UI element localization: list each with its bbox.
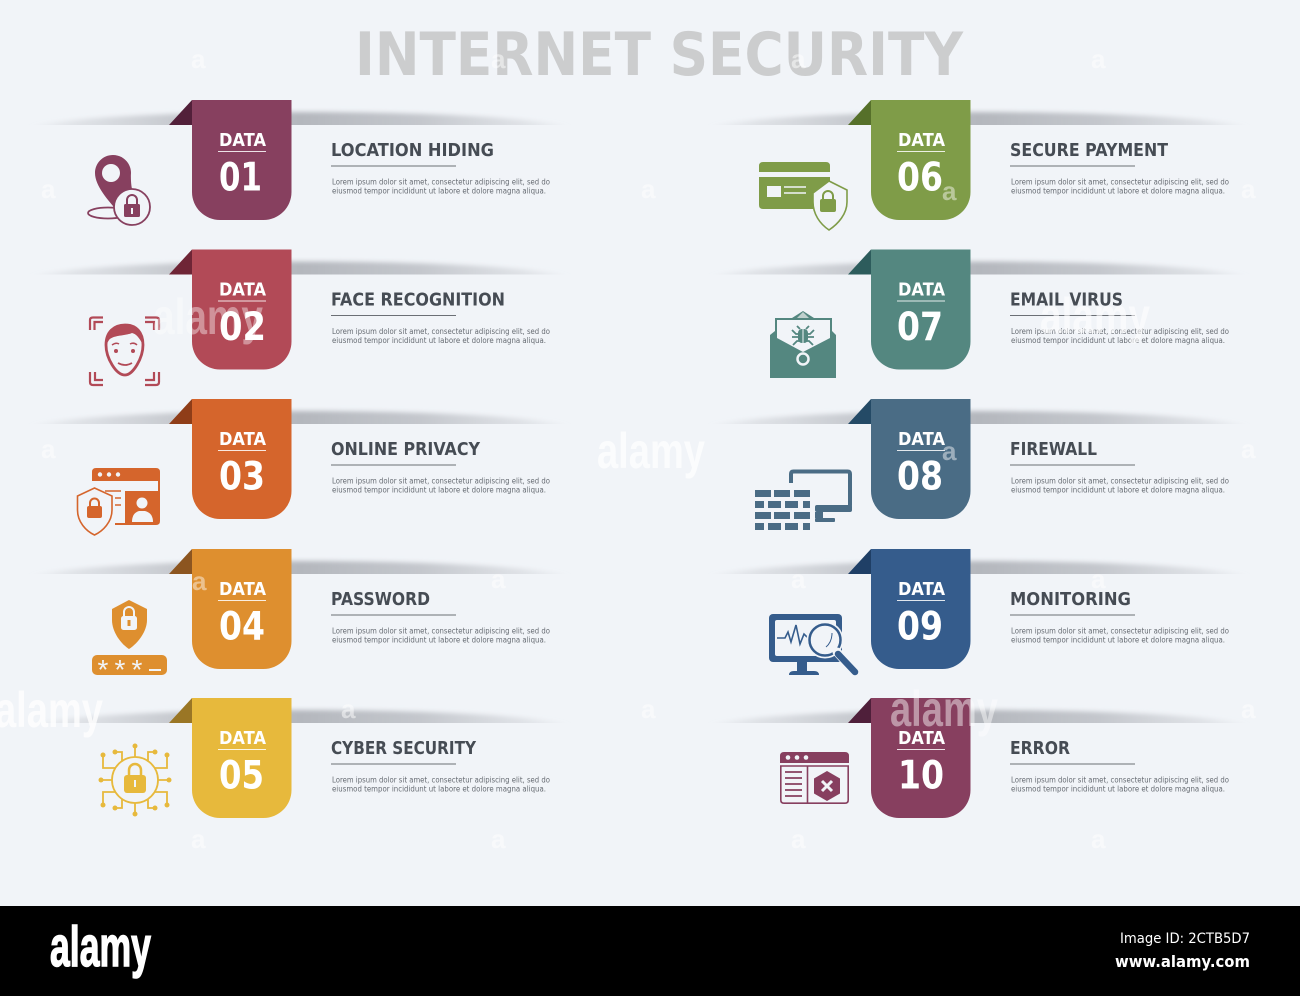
website: www.alamy.com bbox=[1115, 952, 1250, 971]
heading 02: FACE RECOGNITION bbox=[331, 290, 505, 310]
text 05: eiusmod tempor incididunt ut labore et dolore magna aliqua. bbox=[332, 784, 546, 794]
heading 07: EMAIL VIRUS bbox=[1010, 290, 1123, 310]
ribbon 07 bbox=[848, 250, 970, 370]
icon: shield lock and password field: *** bbox=[98, 654, 142, 685]
ribbon 09 bbox=[848, 549, 970, 669]
panel: 10 error bbox=[704, 698, 1254, 818]
ribbon 01 bbox=[169, 100, 292, 220]
heading 05: CYBER SECURITY bbox=[331, 738, 477, 759]
watermark overlay: a bbox=[491, 564, 506, 594]
ribbon 07: 07 bbox=[897, 305, 943, 350]
text 01: eiusmod tempor incididunt ut labore et dolore magna aliqua. bbox=[332, 186, 546, 196]
ribbon 04: 04 bbox=[219, 604, 265, 650]
ribbon 01: DATA bbox=[219, 130, 266, 151]
ribbon 05: 05 bbox=[219, 754, 264, 798]
text 03 bbox=[332, 476, 550, 494]
text 04: Lorem ipsum dolor sit amet, consectetur adipiscing elit, sed do bbox=[332, 626, 550, 636]
ribbon 08: DATA bbox=[898, 429, 945, 450]
watermark overlay: a bbox=[1241, 694, 1256, 724]
icon: face scan bbox=[90, 318, 159, 385]
text 02: Lorem ipsum dolor sit amet, consectetur adipiscing elit, sed do bbox=[332, 327, 550, 336]
text 06: eiusmod tempor incididunt ut labore et dolore magna aliqua. bbox=[1011, 186, 1225, 196]
text 03: eiusmod tempor incididunt ut labore et dolore magna aliqua. bbox=[332, 486, 546, 494]
watermark overlay: alamy bbox=[597, 423, 705, 479]
panel: 09 monitoring bbox=[704, 549, 1254, 669]
ribbon 06: DATA bbox=[898, 130, 945, 151]
icon: credit card with shield bbox=[759, 162, 847, 230]
panel: 06 secure payment bbox=[704, 100, 1254, 220]
watermark overlay: alamy bbox=[153, 289, 263, 345]
text 07: Lorem ipsum dolor sit amet, consectetur adipiscing elit, sed do bbox=[1011, 327, 1229, 336]
watermark overlay bbox=[0, 44, 1256, 854]
ribbon 08: 08 bbox=[897, 454, 943, 500]
heading 09: MONITORING bbox=[1010, 589, 1131, 610]
watermark overlay: a bbox=[641, 694, 656, 724]
watermark overlay: a bbox=[791, 564, 806, 594]
watermark overlay: alamy bbox=[1040, 288, 1150, 344]
watermark overlay: a bbox=[1091, 564, 1106, 594]
panel: 03 online privacy bbox=[25, 399, 575, 519]
text 09 bbox=[1011, 626, 1229, 644]
heading 01: LOCATION HIDING bbox=[331, 140, 494, 161]
ribbon 04 bbox=[169, 549, 292, 669]
alamy logo: alamy bbox=[50, 915, 151, 979]
text 04 bbox=[332, 626, 550, 644]
title: INTERNET SECURITY bbox=[355, 20, 964, 90]
text 08: Lorem ipsum dolor sit amet, consectetur adipiscing elit, sed do bbox=[1011, 476, 1229, 486]
ribbon 02 bbox=[169, 250, 292, 370]
icon: browser with shield and user bbox=[78, 468, 160, 535]
image id: Image ID: 2CTB5D7 bbox=[1120, 931, 1250, 947]
text 06: Lorem ipsum dolor sit amet, consectetur adipiscing elit, sed do bbox=[1011, 178, 1229, 186]
heading 04: PASSWORD bbox=[331, 589, 430, 610]
watermark overlay: a bbox=[191, 824, 206, 854]
text 07 bbox=[1011, 327, 1229, 345]
watermark overlay: a bbox=[942, 176, 957, 206]
ribbon 06: 06 bbox=[897, 156, 943, 200]
text 10: Lorem ipsum dolor sit amet, consectetur adipiscing elit, sed do bbox=[1011, 776, 1229, 784]
icon: shield lock and password field bbox=[92, 600, 167, 685]
text 06 bbox=[1011, 178, 1229, 196]
text 08 bbox=[1011, 476, 1229, 494]
text 03: Lorem ipsum dolor sit amet, consectetur adipiscing elit, sed do bbox=[332, 476, 550, 486]
panel: 01 location hiding bbox=[25, 100, 575, 220]
watermark overlay: a bbox=[1241, 174, 1256, 204]
heading 03: ONLINE PRIVACY bbox=[331, 439, 481, 460]
text 01 bbox=[332, 178, 550, 196]
text 10 bbox=[1011, 776, 1229, 794]
heading 08: FIREWALL bbox=[1010, 439, 1097, 460]
icon: browser error window bbox=[780, 752, 849, 803]
watermark overlay: a bbox=[791, 824, 806, 854]
icon: brick wall and monitor bbox=[755, 472, 852, 530]
text 02 bbox=[332, 327, 550, 345]
text 05: Lorem ipsum dolor sit amet, consectetur adipiscing elit, sed do bbox=[332, 776, 550, 784]
ribbon 03: 03 bbox=[219, 454, 265, 500]
watermark overlay: a bbox=[942, 436, 957, 466]
text 08: eiusmod tempor incididunt ut labore et dolore magna aliqua. bbox=[1011, 486, 1225, 494]
panel: 02 face recognition bbox=[25, 250, 575, 370]
ribbon 10 bbox=[848, 698, 970, 818]
text 09: eiusmod tempor incididunt ut labore et dolore magna aliqua. bbox=[1011, 636, 1225, 644]
icon: circuit lock bbox=[98, 744, 172, 816]
text 04: eiusmod tempor incididunt ut labore et dolore magna aliqua. bbox=[332, 636, 546, 644]
watermark overlay: a bbox=[1241, 434, 1256, 464]
watermark overlay: a bbox=[41, 174, 56, 204]
text 02: eiusmod tempor incididunt ut labore et dolore magna aliqua. bbox=[332, 336, 546, 345]
text 05 bbox=[332, 776, 550, 794]
text 09: Lorem ipsum dolor sit amet, consectetur adipiscing elit, sed do bbox=[1011, 626, 1229, 636]
ribbon 09: DATA bbox=[898, 579, 945, 600]
watermark overlay: a bbox=[192, 566, 207, 596]
watermark overlay: a bbox=[491, 44, 506, 74]
icon: envelope with bug bbox=[770, 311, 836, 378]
icon: monitor with magnifier bbox=[769, 614, 855, 675]
ribbon 04: DATA bbox=[219, 579, 266, 600]
watermark overlay: a bbox=[191, 44, 206, 74]
footer bar bbox=[0, 906, 1300, 996]
watermark overlay: a bbox=[1091, 824, 1106, 854]
text 01: Lorem ipsum dolor sit amet, consectetur adipiscing elit, sed do bbox=[332, 178, 550, 186]
watermark overlay: a bbox=[1091, 44, 1106, 74]
icon: location pin with lock bbox=[88, 155, 150, 225]
ribbon 08 bbox=[848, 399, 970, 519]
ribbon 10: 10 bbox=[898, 754, 944, 798]
ribbon 10: DATA bbox=[898, 728, 945, 749]
watermark overlay: a bbox=[791, 44, 806, 74]
panel: 07 email virus bbox=[704, 250, 1254, 370]
ribbon 06 bbox=[848, 100, 970, 220]
watermark overlay: a bbox=[341, 694, 356, 724]
ribbon 01: 01 bbox=[219, 156, 262, 200]
ribbon 07: DATA bbox=[898, 280, 945, 300]
heading 10: ERROR bbox=[1010, 738, 1070, 759]
watermark overlay: alamy bbox=[890, 681, 998, 737]
watermark overlay: a bbox=[41, 434, 56, 464]
watermark overlay: a bbox=[491, 824, 506, 854]
panel: 04 password bbox=[25, 549, 575, 669]
watermark overlay: a bbox=[641, 174, 656, 204]
ribbon 02: 02 bbox=[219, 305, 266, 350]
ribbon 05: DATA bbox=[219, 728, 266, 749]
heading 06: SECURE PAYMENT bbox=[1010, 140, 1169, 161]
ribbon 03: DATA bbox=[219, 429, 266, 450]
ribbon 03 bbox=[169, 399, 292, 519]
text 07: eiusmod tempor incididunt ut labore et dolore magna aliqua. bbox=[1011, 336, 1225, 345]
panel: 05 cyber security bbox=[56, 698, 550, 818]
text 10: eiusmod tempor incididunt ut labore et dolore magna aliqua. bbox=[1011, 784, 1225, 794]
ribbon 02: DATA bbox=[219, 280, 266, 300]
ribbon 05 bbox=[169, 698, 292, 818]
panel: 08 firewall bbox=[704, 399, 1254, 519]
ribbon 09: 09 bbox=[897, 604, 943, 650]
